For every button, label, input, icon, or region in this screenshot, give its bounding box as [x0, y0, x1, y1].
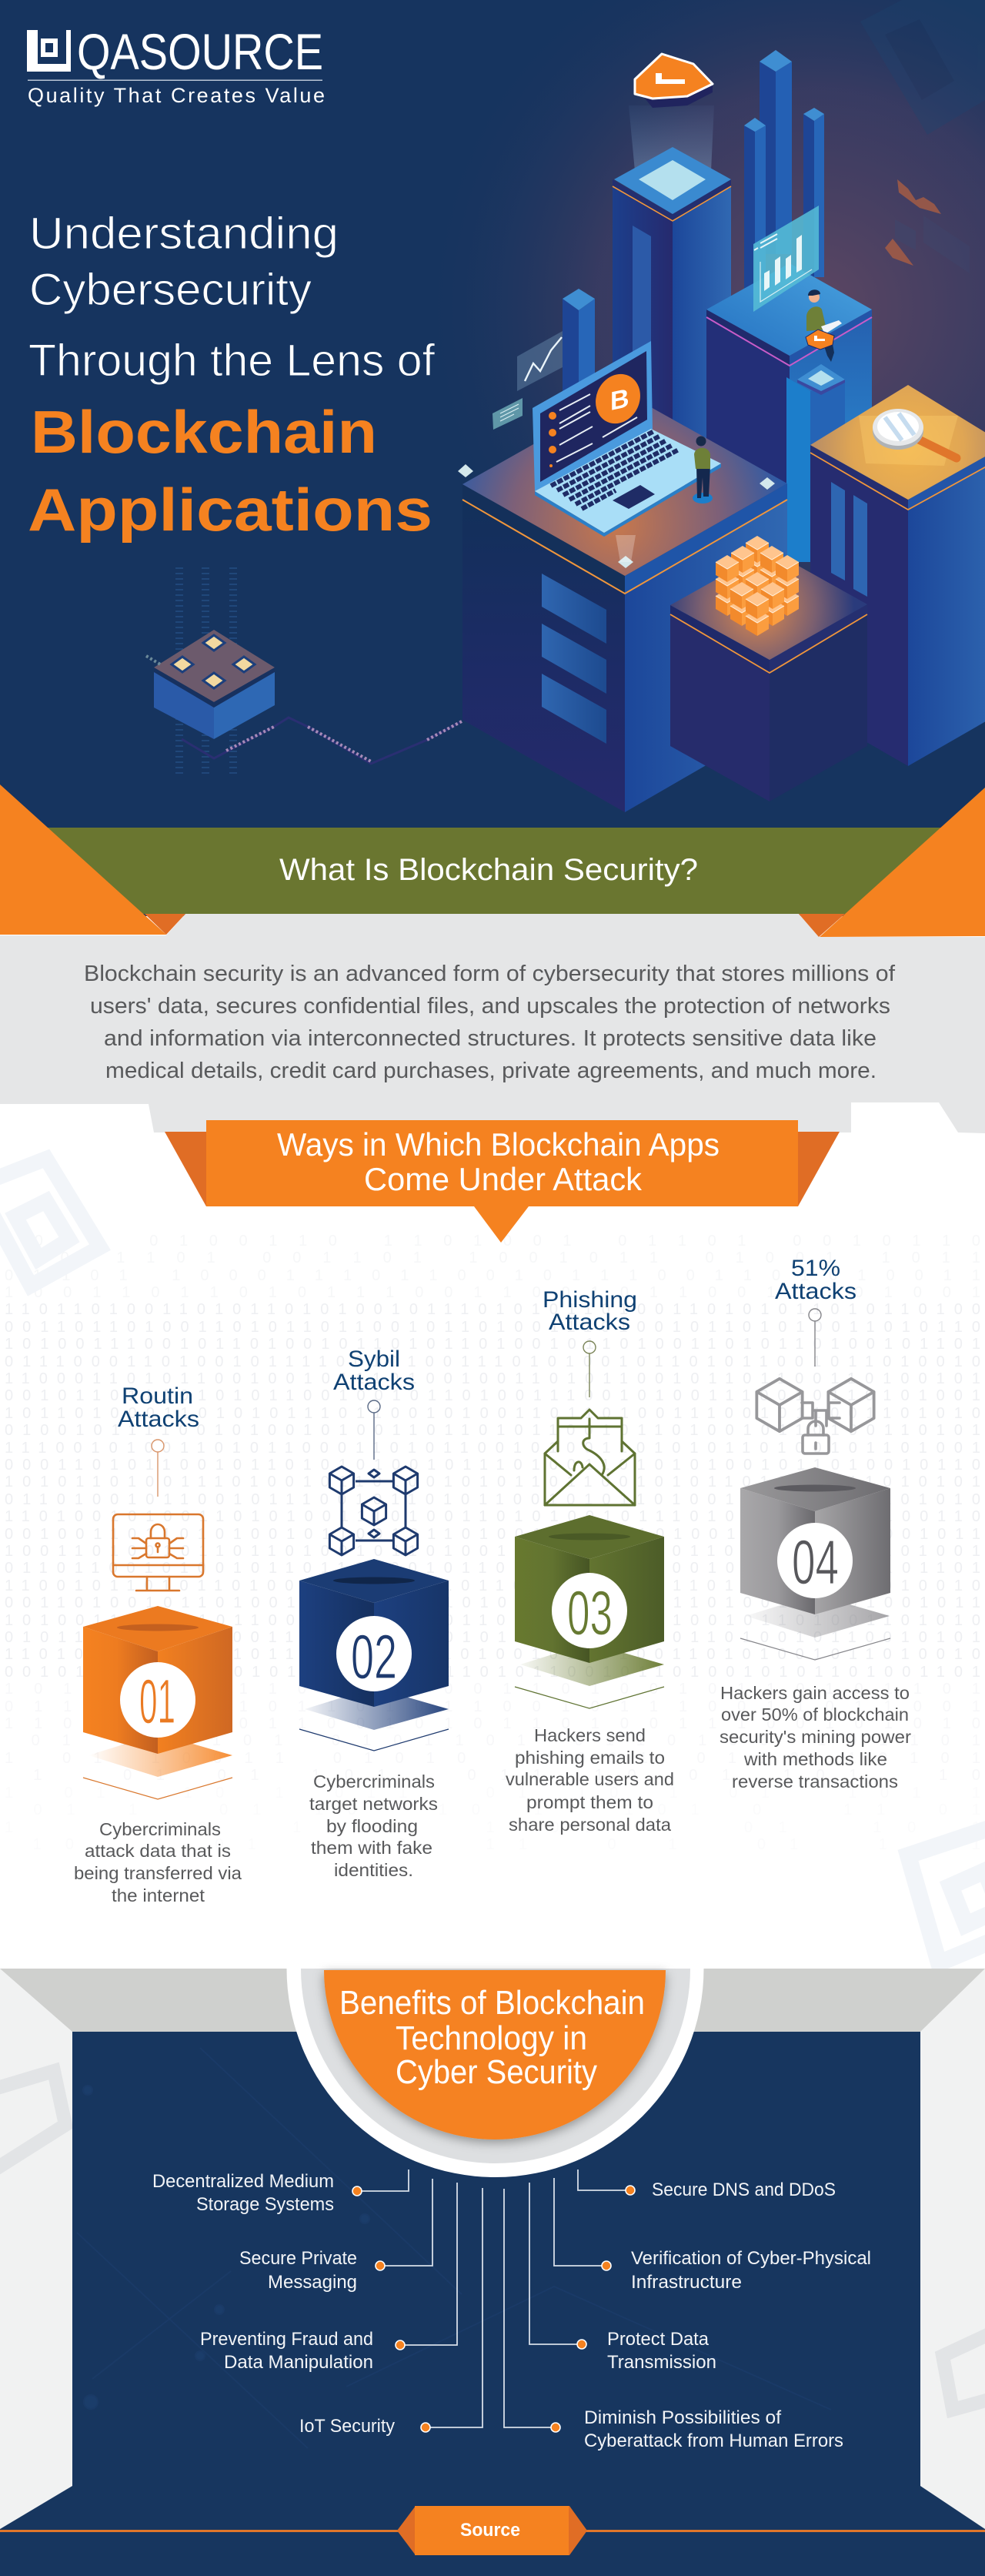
- binary background: 00011010110010110101010010111010011010101001011010010110: [5, 1457, 980, 1474]
- benefits labels left: [152, 2171, 395, 2437]
- benefits heading circle: Technology in: [396, 2019, 587, 2057]
- attack title: [775, 1256, 856, 1304]
- benefits labels left: Data Manipulation: [224, 2352, 373, 2373]
- cube 03: [515, 1515, 664, 1708]
- binary background: 10100110100101100101011010110100100110100101101001101010: [5, 1612, 980, 1629]
- binary background: 11001011010110100101001101011010010100110101001011010010: [5, 1577, 980, 1594]
- cube 01: 01: [139, 1667, 175, 1737]
- main title: Cybersecurity: [29, 265, 312, 315]
- icon: linked cubes and lock: [756, 1379, 874, 1454]
- source badge: Source: [460, 2520, 520, 2541]
- intro text: users' data, secures confidential files, and upscales the protection of networks: [90, 994, 890, 1019]
- tall tower: [613, 147, 731, 493]
- faint orange data widgets: [885, 179, 970, 273]
- attack title: [543, 1287, 637, 1335]
- attack title: [118, 1383, 199, 1432]
- binary background: 11010101001101011001101101010010110100110101001011010010: [5, 1646, 980, 1663]
- icon: monitor with lock: [113, 1514, 203, 1591]
- cube 03: 03: [567, 1578, 613, 1648]
- binary background: 01101100101001011011010010110100101101001010110100101101: [5, 1560, 980, 1577]
- cube platform block: [670, 550, 867, 801]
- binary background: 11011010011010110101001011101010110100110101011010110100: [5, 1301, 980, 1318]
- attack description: identities.: [334, 1860, 413, 1880]
- hero panel: [0, 0, 985, 916]
- benefits labels right: Protect Data: [607, 2329, 710, 2350]
- right block: [810, 385, 985, 766]
- binary background: 10110100011010101110110010100110110100111001011001101010: [5, 1405, 980, 1422]
- binary background: 10011010010110110100101101001101011001011010010101101001: [5, 1543, 980, 1560]
- main title: Understanding: [29, 209, 339, 259]
- binary background: 1 0 1 1 0 1 0 0 1 1 0 1 1 0 0 1 0 1 1 0 1 0 0 1 1 0 1 1: [5, 1250, 980, 1266]
- icon: phishing envelope: [545, 1410, 635, 1505]
- main title: [28, 209, 436, 544]
- main title: Applications: [28, 476, 432, 544]
- attack description: reverse transactions: [732, 1771, 898, 1791]
- logo: QASOURCE: [77, 23, 323, 80]
- seated person: [806, 289, 842, 362]
- magnifier icon: [873, 409, 957, 458]
- orange divider: [0, 2530, 985, 2532]
- laptop: [533, 341, 721, 537]
- platform light tiles: [458, 464, 775, 568]
- binary background: 11000110101100100101110100100110101100101101100110100101: [5, 1370, 980, 1387]
- binary background: 1 0 1 1 0 1 0 1 1 0 1 1 0 1 0 1 1 0 1 1: [5, 1785, 980, 1802]
- binary background: 01110001101001011110010100111010100101101011001011010010: [5, 1353, 980, 1370]
- grey watermarks: [0, 2071, 985, 2410]
- attack title: Attacks: [118, 1407, 199, 1432]
- binary background: 00110100101101001110101001010011011010110100101101001011: [5, 1594, 980, 1611]
- bar chart panel: [753, 206, 819, 312]
- benefits labels right: Transmission: [607, 2352, 716, 2373]
- panel texture: [77, 2048, 831, 2448]
- intro text: and information via interconnected structures. It protects sensitive data like: [104, 1026, 876, 1051]
- logo: Quality That Creates Value: [28, 84, 325, 107]
- small tile column: [786, 364, 845, 562]
- orange data cubes: [716, 536, 799, 636]
- attack title: Attacks: [775, 1279, 856, 1304]
- intro text: Blockchain security is an advanced form of cybersecurity that stores millions of: [84, 962, 896, 986]
- attack title: Attacks: [333, 1370, 415, 1395]
- binary background: 01101001011001011100101101011001010110100101100101101010: [5, 1491, 980, 1508]
- attack description: Cybercriminals: [99, 1819, 221, 1839]
- attack description: security's mining power: [720, 1727, 911, 1747]
- benefits labels left: Decentralized Medium: [152, 2171, 334, 2192]
- benefits labels right: Verification of Cyber-Physical: [631, 2248, 871, 2269]
- attack description: [506, 1725, 674, 1835]
- cube 01: [83, 1606, 232, 1799]
- attack description: being transferred via: [74, 1863, 242, 1883]
- binary background: 1 0 1 0 1 1 0 1 1 0 1 0 1 1 0 1: [5, 1836, 980, 1853]
- benefits labels left: Secure Private: [239, 2248, 357, 2269]
- small data panel: [492, 398, 523, 430]
- connector lines and dots: [352, 2170, 635, 2432]
- attack description: vulnerable users and: [506, 1769, 674, 1789]
- intro text: medical details, credit card purchases, private agreements, and much more.: [105, 1059, 876, 1083]
- attack description: [309, 1771, 438, 1880]
- binary background: 1 0 1 1 0 0 1 1 0 1 0 1 0 1 1 0 0 1 0 1 1 0 1 0 1 0 1: [5, 1750, 980, 1767]
- attack description: the internet: [112, 1885, 205, 1905]
- intro text: [84, 962, 896, 1083]
- attack description: Hackers gain access to: [720, 1683, 910, 1703]
- pin line: [368, 1400, 380, 1460]
- attack title: Sybil: [348, 1347, 400, 1372]
- binary background: 00101101100101011001001011010011100101001110010110101001: [5, 1387, 980, 1404]
- binary background: 00101011010010101100100101101011001011010010101101001101: [5, 1664, 980, 1681]
- attack description: phishing emails to: [515, 1748, 665, 1768]
- laptop platform block: [462, 393, 787, 812]
- attacks banner: Come Under Attack: [364, 1161, 643, 1197]
- attack description: attack data that is: [85, 1841, 231, 1861]
- binary background: 1 0 1 1 0 1 0 0 1 1 0 1 1 0 1 0 0 1 0 1 1 0 1 0 0 1 0 1 1 0: [5, 1233, 980, 1250]
- binary background: 0 1 1 0 1 1 0 1 0 1 1 0 1 0 1 1 0 1: [5, 1802, 980, 1818]
- attack description: [720, 1683, 911, 1791]
- benefits labels right: Cyberattack from Human Errors: [584, 2430, 843, 2451]
- attack description: [74, 1819, 242, 1905]
- left spire: [563, 289, 595, 400]
- watermark logo left: [0, 1159, 100, 1286]
- attack title: [333, 1347, 415, 1395]
- green heading band: What Is Blockchain Security?: [279, 853, 698, 887]
- binary background: 1 0 1 1 0 1 0 0 1 1 0 1 0 1 1 0 0 1 1 0 1 0 0 1 0 1 1 0 1 0 1 1 0 1: [5, 1681, 980, 1698]
- attack 02: sybil: [299, 1347, 449, 1880]
- binary background: 1 0 1 0 1 1 0 1 0 1 1 1 0 0 1 1 0 1 1 0: [5, 1767, 980, 1784]
- dotted network path: [146, 656, 462, 764]
- source badge: [397, 2506, 587, 2555]
- mini chip block: [154, 567, 275, 778]
- attack 01: routing: [74, 1383, 242, 1905]
- standing person: [693, 436, 713, 503]
- binary background: 1 0 0 1 1 0 1 1 0 1 0 1 1 1 0 0 1 1 0 0 1 0 1 1 0 0 1 1 1 0 1 0 0 1: [5, 1284, 980, 1301]
- grey intro panel: [0, 914, 985, 1133]
- attack title: Attacks: [549, 1310, 630, 1335]
- tall spires: [744, 50, 824, 289]
- attack title: Phishing: [543, 1287, 637, 1313]
- pin line: [809, 1309, 821, 1367]
- benefits labels left: Storage Systems: [196, 2194, 334, 2215]
- icon: blockchain network: [329, 1467, 418, 1555]
- benefits labels right: Diminish Possibilities of: [584, 2407, 781, 2428]
- binary background: 10100111001011010010110101101001011010011010110100101101: [5, 1336, 980, 1353]
- attack 04: 51 percent: [720, 1256, 911, 1791]
- binary background: 1 1 0 1 1 0 0 1 0 1 1 0 0 1 0 1 0 1 1 0 1 0 0 1 1 1 0 0 1 0 1 0 1 0: [5, 1715, 980, 1732]
- attack title: 51%: [791, 1256, 840, 1281]
- attacks banner: [165, 1120, 840, 1243]
- watermark logo right: [908, 1825, 985, 1963]
- main title: Blockchain: [31, 398, 377, 466]
- binary background: 10101101001110100101101001010110110010101101010011010101: [5, 1474, 980, 1490]
- orange corner triangles: [0, 785, 985, 937]
- binary background: 11100101001101011000110101100101001101010110100101101001: [5, 1440, 980, 1457]
- benefits labels right: [584, 2180, 871, 2451]
- cube 02: [299, 1559, 449, 1751]
- attack description: with methods like: [743, 1749, 887, 1769]
- binary background: [5, 1233, 980, 1853]
- main title: Through the Lens of: [28, 336, 436, 386]
- benefits panel: [0, 1969, 985, 2576]
- attack description: target networks: [309, 1794, 438, 1814]
- attack description: prompt them to: [526, 1792, 653, 1812]
- attack description: them with fake: [311, 1838, 432, 1858]
- cube 02: 02: [351, 1622, 397, 1692]
- binary background: 01011001101010011010010100101101101001011010010110010101: [5, 1629, 980, 1646]
- benefits heading circle: Benefits of Blockchain: [339, 1984, 645, 2022]
- cube 04: [740, 1467, 890, 1660]
- keyboard: [551, 431, 679, 509]
- binary background: 00100110110101001011001011010010110010100110101101001011: [5, 1526, 980, 1543]
- benefits heading circle: [286, 1969, 703, 2177]
- line chart panel: [517, 331, 563, 391]
- benefits labels left: Preventing Fraud and: [200, 2329, 373, 2350]
- shield icon: [635, 54, 713, 108]
- binary background: 1 0 1 0 1 0 1 1 0 1 1 0 1 1 0 1: [5, 1819, 980, 1836]
- attack 03: phishing: [506, 1287, 674, 1835]
- logo: [27, 23, 325, 107]
- attack title: Routin: [122, 1383, 193, 1409]
- binary background: 01001011110010100101001101101011001011010010110100110101: [5, 1422, 980, 1439]
- faint logo watermark: [860, 0, 985, 135]
- cube 04: 04: [792, 1527, 839, 1597]
- binary background: 0 1 1 0 1 1 0 0 0 1 1 1 0 1 1 0 0 1 0 1 1 1 0 0 1 1 0 1 0 1 0 0 1 1: [5, 1267, 980, 1284]
- binary background: 11010010100110101001110100110101001011101001011010100110: [5, 1508, 980, 1525]
- attack description: by flooding: [326, 1816, 418, 1836]
- benefits heading circle: Cyber Security: [396, 2053, 597, 2091]
- benefits labels left: Messaging: [268, 2272, 357, 2293]
- binary background: 0 1 1 0 0 1 1 0 1 0 1 1 0 1 0 1 1 0 0 1 0 1 1 1 0 0 1 1 0 1 1 0 0 1: [5, 1698, 980, 1715]
- binary background: 0 1 1 0 1 1 0 1 0 1 0 1 1 0 1 0 1 1 0 1 0 0 1 0 1 1 0 1: [5, 1732, 980, 1749]
- green heading band: [46, 828, 942, 914]
- attack description: Cybercriminals: [313, 1771, 435, 1791]
- binary background: 00110110100110101101100101101001110100101101010011010110: [5, 1319, 980, 1336]
- shield beam: [629, 105, 714, 171]
- attack description: Hackers send: [534, 1725, 646, 1745]
- bitcoin coin: [588, 366, 648, 431]
- pin line: [152, 1440, 164, 1497]
- benefits labels right: Secure DNS and DDoS: [652, 2180, 836, 2200]
- attacks banner: Ways in Which Blockchain Apps: [277, 1126, 720, 1163]
- middle block: [706, 263, 872, 524]
- attack description: share personal data: [509, 1815, 671, 1835]
- bitcoin coin: B: [610, 383, 629, 417]
- benefits labels right: Infrastructure: [631, 2272, 742, 2293]
- attack description: over 50% of blockchain: [721, 1705, 909, 1725]
- benefits labels left: IoT Security: [299, 2416, 395, 2437]
- pin line: [583, 1341, 596, 1397]
